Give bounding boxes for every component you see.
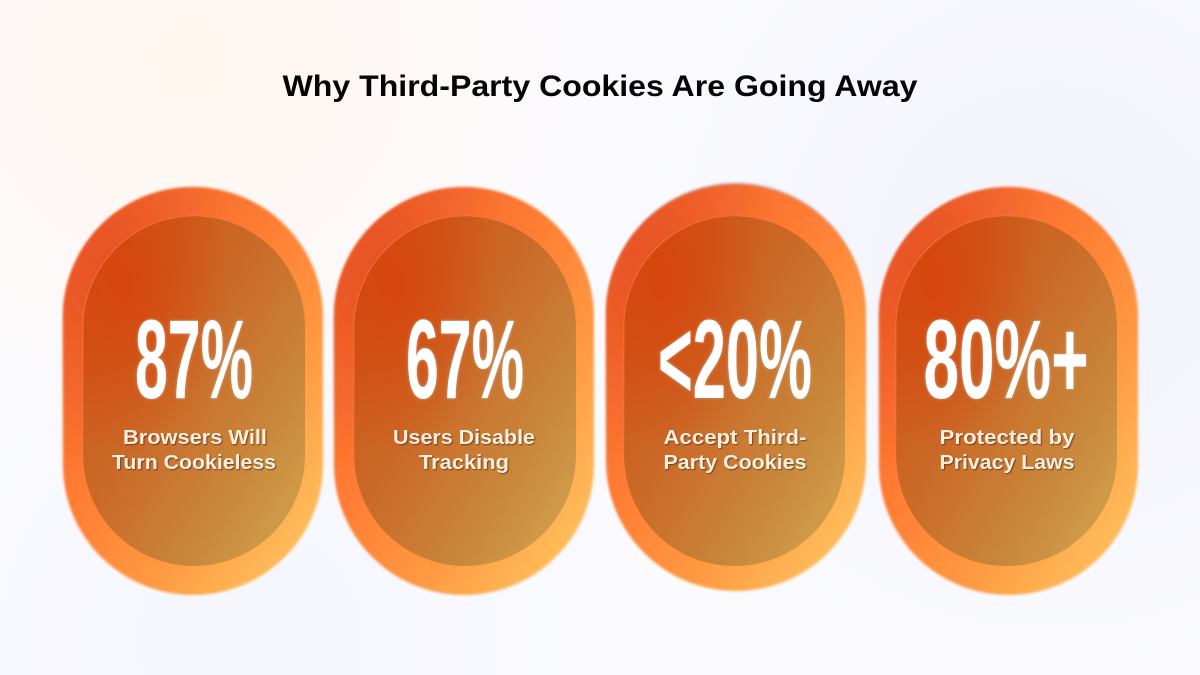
stat: under 20%: <20%	[658, 297, 812, 422]
title: Why Third-Party Cookies Are Going Away	[282, 70, 918, 103]
inner pill	[83, 216, 305, 566]
label: privacy: Protected by	[940, 427, 1075, 449]
stat: 67%: 67%	[406, 297, 524, 422]
label: browsers: Turn Cookieless	[112, 452, 276, 474]
grey back edge	[607, 182, 865, 582]
label: accept: Party Cookies	[664, 452, 806, 474]
label: users: Tracking	[419, 452, 509, 474]
label: accept: Accept Third-	[664, 427, 806, 449]
panel: under 20% accept	[606, 182, 866, 591]
stat: 87%: 87%	[135, 297, 253, 422]
panel: 80%+ privacy	[879, 187, 1138, 595]
inner pill	[896, 216, 1117, 566]
label: browsers: Browsers Will	[123, 427, 267, 449]
inner pill	[624, 216, 845, 566]
panel: 87% browsers	[63, 187, 323, 595]
label: privacy: Privacy Laws	[940, 452, 1074, 474]
inner pill	[354, 216, 576, 566]
label: users: Users Disable	[393, 427, 535, 449]
panel: 67% users	[334, 187, 594, 595]
